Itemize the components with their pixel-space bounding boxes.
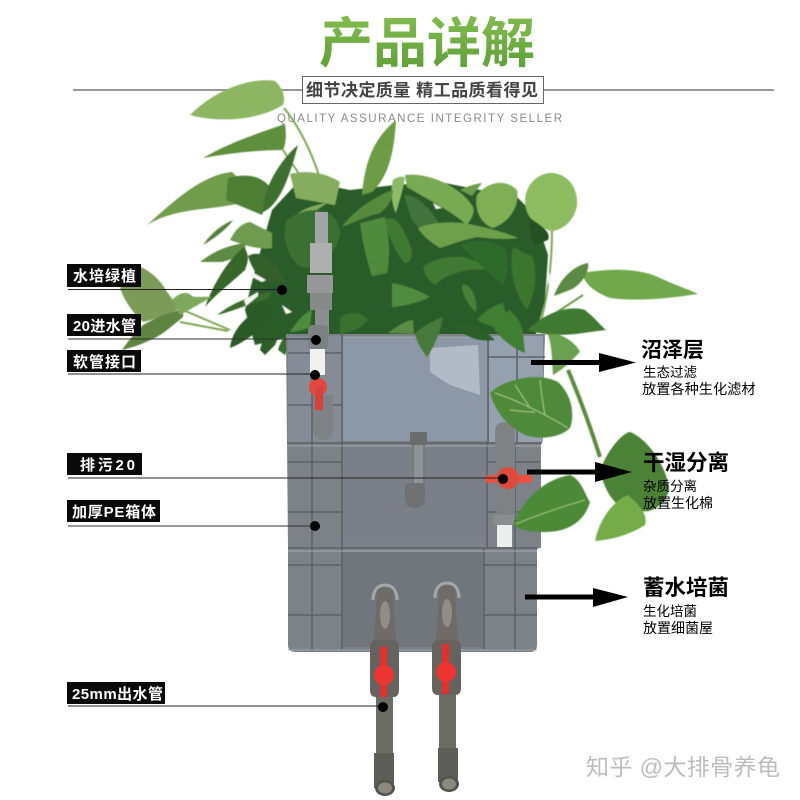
outlet pipes [370, 583, 461, 796]
white gaps centre [433, 203, 552, 285]
window reflection [430, 345, 480, 395]
sight tube [405, 432, 427, 508]
english tagline: QUALITY ASSURANCE INTEGRITY SELLER [277, 113, 562, 125]
inlet pipe [307, 212, 333, 440]
text: 沼泽层: 生态过滤 [643, 365, 697, 380]
hanging vine stem [568, 370, 600, 457]
text: 干湿分离 [643, 450, 729, 511]
centre leaves [285, 210, 340, 268]
left spiky leaves [203, 220, 233, 245]
callout: 排污20: 排污20 [80, 456, 135, 474]
callout: 25mm出水管: 25mm出水管 [72, 685, 163, 703]
callout: 排污20 [67, 453, 508, 484]
watermark: 知乎 @大排骨养龟 [586, 754, 780, 780]
text: 干湿分离: 杂质分离 [643, 478, 697, 494]
callout: 加厚PE箱体 [67, 500, 320, 531]
callout: 水培绿植: 水培绿植 [73, 267, 136, 285]
title: 产品详解 [319, 0, 535, 78]
arrow: separation layer [527, 462, 632, 482]
white hose adapter [310, 349, 325, 375]
inlet elbow [313, 395, 333, 440]
patterned leaf [490, 377, 572, 438]
trailing leaves [120, 267, 177, 322]
inlet red valve [309, 378, 327, 410]
left top tier cells [288, 336, 342, 442]
text: 沼泽层: 沼泽层 [641, 339, 704, 362]
tank body tiers [286, 334, 545, 652]
right red valve [485, 467, 532, 489]
text: 沼泽层 [641, 339, 756, 398]
tank ribs [287, 334, 545, 650]
text: 干湿分离: 干湿分离 [643, 450, 729, 475]
text: 沼泽层: 放置各种生化滤材 [642, 382, 756, 398]
plant foliage behind tank [120, 80, 698, 375]
bottom tier panel [343, 552, 483, 647]
header rule [73, 89, 774, 91]
text: 蓄水培菌 [643, 576, 729, 636]
arrow: storage layer [525, 588, 628, 607]
right outlet [432, 583, 461, 792]
subtitle box [302, 76, 544, 104]
white gaps [244, 272, 292, 314]
subtitle box: 细节决定质量 精工品质看得见 [306, 80, 538, 100]
callout: 20进水管: 20进水管 [73, 317, 136, 335]
text: 蓄水培菌: 放置细菌屋 [643, 620, 713, 636]
right top tier cells [489, 336, 543, 442]
leaves over tank rim [415, 317, 443, 357]
top tier window panel [343, 337, 488, 441]
callout: 25mm出水管 [67, 682, 388, 712]
callout: 软管接口 [67, 350, 320, 380]
right upper leaves [525, 173, 577, 231]
big right leaf [600, 432, 669, 511]
foreground leaves [290, 310, 669, 541]
right drain pipe [485, 422, 532, 547]
arrow: swamp layer [531, 353, 636, 372]
text: 蓄水培菌: 蓄水培菌 [643, 576, 729, 600]
callout: 加厚PE箱体: 加厚PE箱体 [72, 503, 156, 521]
stems [180, 108, 583, 331]
middle tier panel [344, 447, 487, 543]
upper leaves [190, 80, 284, 119]
callout: 20进水管 [67, 314, 321, 345]
small right leaf [595, 495, 646, 541]
callout: 水培绿植 [67, 264, 287, 295]
tank [286, 334, 545, 652]
lower leaf [513, 475, 590, 532]
text: 干湿分离: 放置生化棉 [643, 495, 713, 511]
leaf cluster base [245, 180, 548, 345]
callout: 软管接口: 软管接口 [73, 353, 136, 371]
left outlet [370, 585, 399, 796]
text: 蓄水培菌: 生化培菌 [643, 604, 697, 619]
